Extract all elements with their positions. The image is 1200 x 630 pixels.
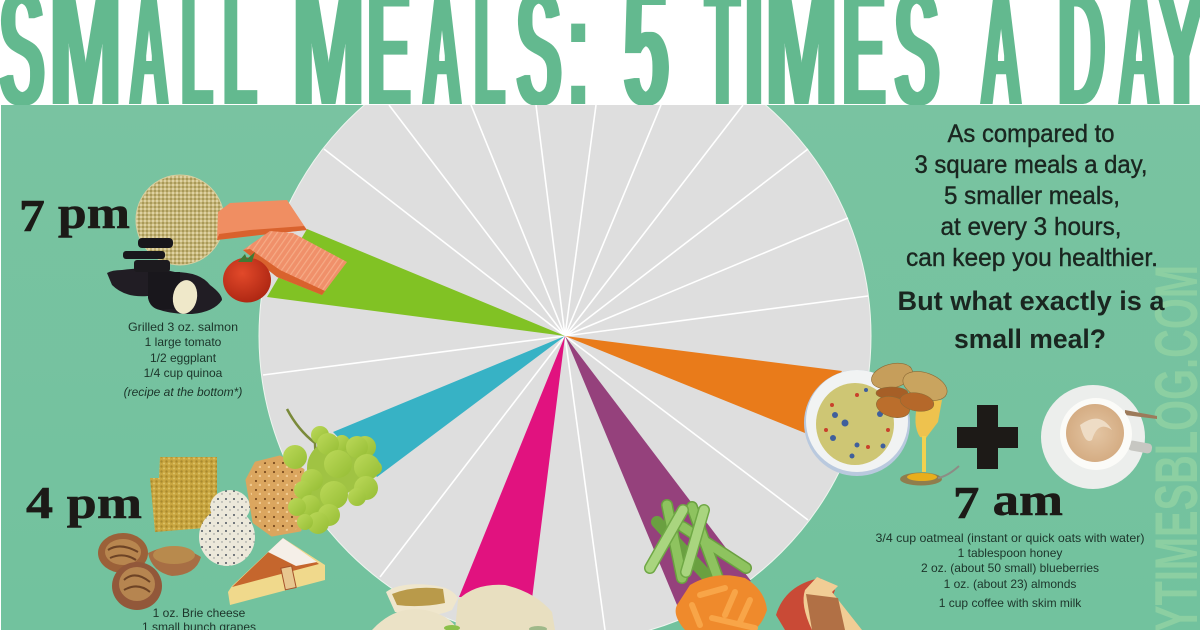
heading: 7 pm: 7 — [19, 191, 45, 241]
text: 7 pm menu — [124, 320, 242, 399]
icon: baby carrots — [676, 575, 767, 630]
text: intro: at every 3 hours, — [940, 213, 1122, 241]
heading: 7 pm: pm — [45, 188, 130, 238]
title — [0, 0, 1200, 142]
text: 4 pm menu — [142, 606, 256, 630]
icon: coffee cup — [1041, 385, 1157, 489]
icon: almonds — [869, 359, 951, 421]
icon: celery sticks — [650, 505, 746, 578]
text: 4 pm menu: 1 oz. Brie cheese — [153, 606, 246, 620]
text: intro: As compared to — [948, 120, 1114, 148]
heading: 4 pm: 4 pm — [26, 478, 142, 528]
text: 7 am menu: 3/4 cup oatmeal (instant or quick oats with water) — [876, 531, 1144, 545]
wedge: lunch pink — [459, 336, 565, 599]
text: 7 am menu: 1 tablespoon honey — [958, 546, 1062, 560]
wedge: 4 pm teal — [333, 336, 565, 477]
text: intro: 5 smaller meals, — [944, 182, 1120, 210]
heading: 7 am: 7 — [953, 478, 979, 528]
wedge: snack purple — [565, 336, 751, 605]
text: intro — [906, 120, 1158, 272]
icon: walnuts — [98, 533, 201, 610]
text: intro: 3 square meals a day, — [914, 151, 1148, 179]
panel: clock dial — [258, 105, 872, 630]
icon: oatmeal bowl — [804, 370, 910, 476]
icon: pita pockets — [372, 584, 555, 630]
text: 7 pm menu: (recipe at the bottom*) — [124, 385, 242, 399]
wedge: 7 am orange — [565, 336, 842, 433]
text: 7 am menu: 2 oz. (about 50 small) blueberries — [921, 561, 1099, 575]
heading: question — [898, 286, 1165, 354]
text: 7 pm menu: Grilled 3 oz. salmon — [128, 320, 238, 334]
icon: tomato — [223, 252, 271, 302]
text: 7 am menu: 1 cup coffee with skim milk — [939, 596, 1082, 610]
icon: plus sign — [957, 405, 1018, 469]
text: 7 am menu — [876, 531, 1144, 610]
icon: eggplant — [107, 238, 222, 316]
heading: question: small meal? — [954, 324, 1106, 354]
icon: honey dipper and spoon — [900, 400, 959, 486]
icon: grapes — [283, 409, 382, 534]
heading: 7 am: am — [979, 475, 1063, 525]
icon: quinoa — [136, 175, 224, 265]
icon: brie cheese — [228, 538, 325, 605]
icon: crackers — [150, 457, 303, 566]
heading: question: But what exactly is a — [898, 286, 1165, 316]
text: 7 am menu: 1 oz. (about 23) almonds — [944, 577, 1076, 591]
icon: salmon fillets — [217, 200, 347, 295]
text: 7 pm menu: 1/4 cup quinoa — [144, 366, 223, 380]
wedge: 7 pm green — [267, 229, 565, 336]
text: 7 pm menu: 1 large tomato — [145, 335, 222, 349]
text: intro: can keep you healthier. — [906, 244, 1158, 272]
icon: apple and sandwich — [776, 577, 862, 630]
text: 7 pm menu: 1/2 eggplant — [150, 351, 217, 365]
